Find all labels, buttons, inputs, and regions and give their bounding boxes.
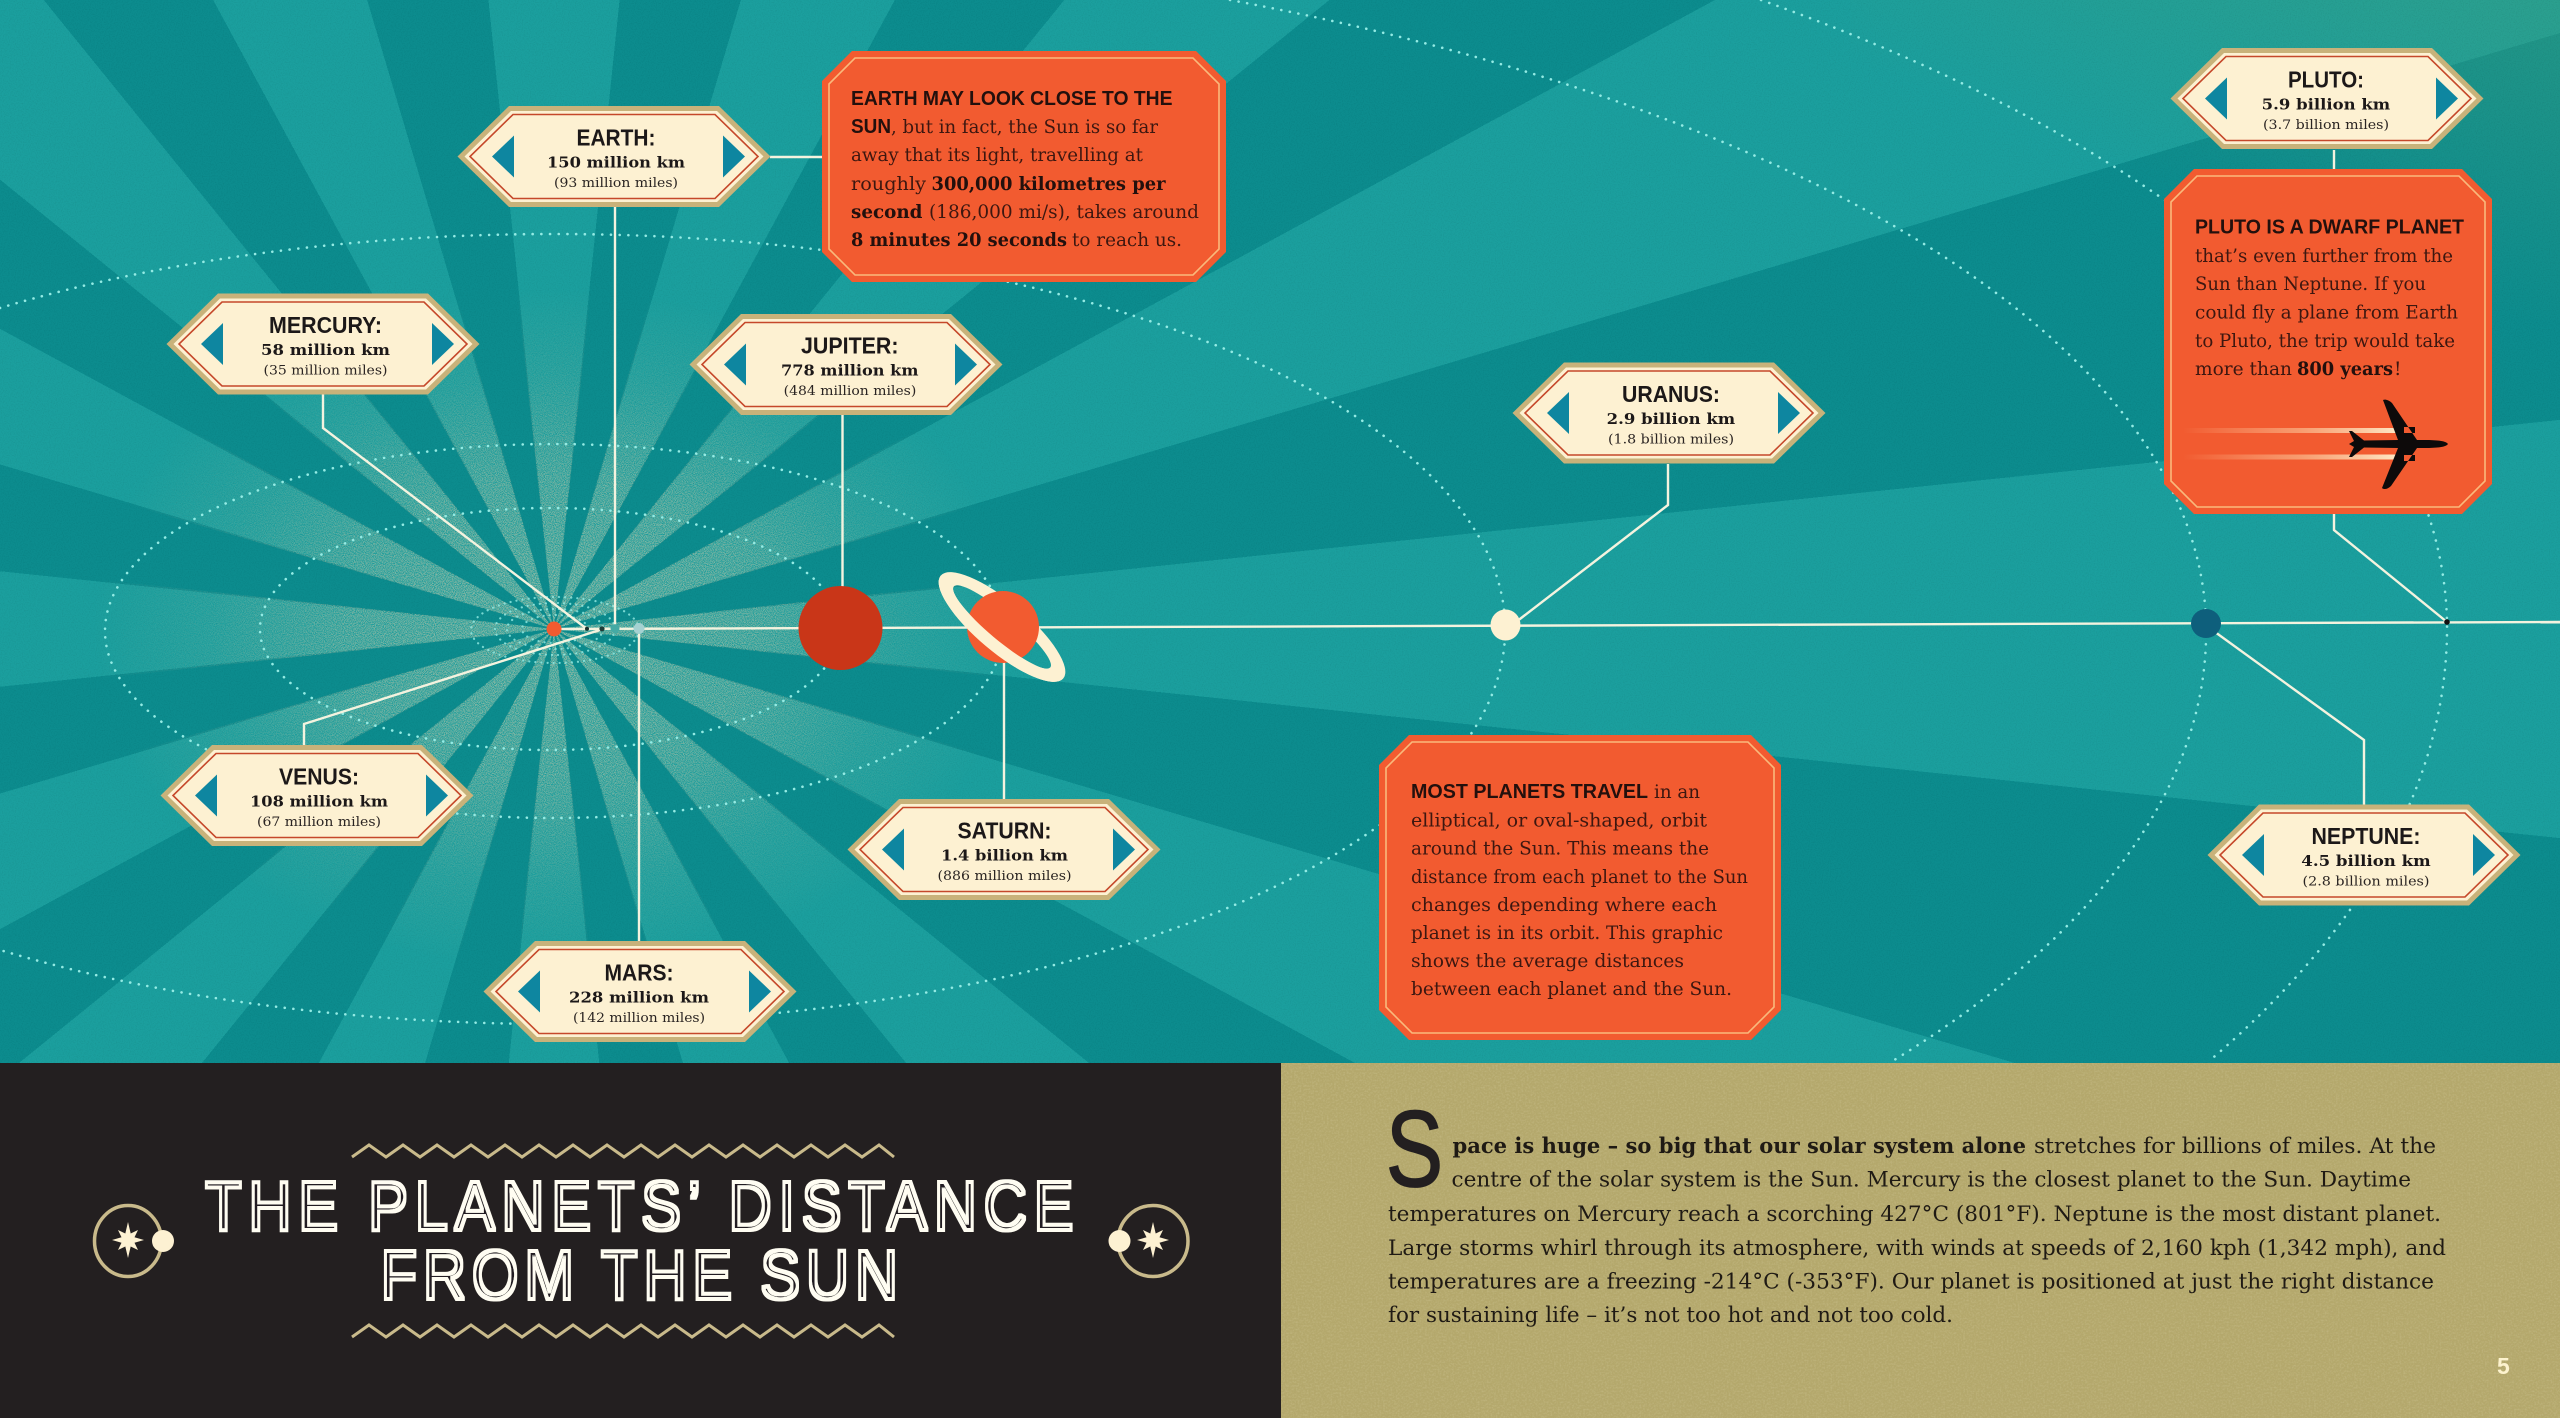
label: Pluto: PLUTO: bbox=[2288, 66, 2364, 92]
label: Mercury: MERCURY: bbox=[269, 312, 382, 338]
planet: Venus bbox=[599, 626, 605, 631]
label: Jupiter: (484 million miles) bbox=[784, 384, 916, 399]
title line two: FROM THE SUN bbox=[380, 1236, 898, 1314]
callout: elliptical orbits: between each planet and the Sun. bbox=[1411, 979, 1732, 1000]
connector lines bbox=[304, 150, 2560, 941]
label: Venus: (67 million miles) bbox=[257, 815, 381, 830]
label: Mars: MARS: bbox=[604, 960, 674, 986]
panel: background tint and grain bbox=[0, 0, 2560, 1063]
label: Saturn: (886 million miles) bbox=[938, 869, 1072, 884]
drop cap: S bbox=[1386, 1088, 1443, 1209]
icon: Sun bbox=[546, 622, 562, 636]
planet: Earth bbox=[610, 624, 620, 633]
panel: title band bbox=[0, 1063, 1281, 1418]
planet: Neptune bbox=[2191, 609, 2221, 638]
label: Uranus bbox=[1512, 362, 1826, 464]
label: Saturn: 1.4 billion km bbox=[941, 846, 1068, 864]
body paragraph: temperatures on Mercury reach a scorching 427°C (801°F). Neptune is the most distant planet. bbox=[1388, 1202, 2441, 1226]
callout: elliptical orbits: planet is in its orbit. This graphic bbox=[1411, 923, 1723, 944]
callout: Earth light travel: 8 minutes 20 seconds bbox=[851, 230, 1067, 251]
label: Mercury: (35 million miles) bbox=[264, 364, 388, 378]
callout: Earth light travel: , but in fact, the Sun is so far bbox=[891, 117, 1158, 138]
callout: Earth light travel: to reach us. bbox=[1072, 230, 1182, 251]
label: Venus: VENUS: bbox=[279, 764, 359, 790]
label: Jupiter bbox=[690, 314, 1002, 415]
panel: intro text bbox=[1281, 1063, 2560, 1418]
icon: aeroplane bbox=[2349, 400, 2448, 489]
callout: Earth light travel: second bbox=[851, 202, 923, 223]
callout: Earth light travel: away that its light, travelling at bbox=[851, 145, 1144, 166]
label: Earth bbox=[458, 106, 770, 207]
label: Earth: (93 million miles) bbox=[554, 176, 678, 191]
callout: elliptical orbits: shows the average distances bbox=[1411, 951, 1684, 972]
label: Earth: 150 million km bbox=[547, 154, 685, 172]
icon: contrails bbox=[2183, 428, 2397, 460]
label: Neptune: (2.8 billion miles) bbox=[2302, 874, 2430, 890]
callout: Pluto dwarf planet bbox=[2164, 169, 2492, 514]
label: Pluto: 5.9 billion km bbox=[2262, 96, 2390, 114]
panel: sunburst background rays bbox=[0, 0, 2560, 1063]
label: Venus: 108 million km bbox=[250, 792, 388, 810]
callout: Earth light travel: (186,000 mi/s), takes around bbox=[929, 202, 1199, 223]
body paragraph: Large storms whirl through its atmosphere, with winds at speeds of 2,160 kph (1,342 mph), and bbox=[1388, 1236, 2446, 1260]
callout: elliptical orbits bbox=[1379, 735, 1781, 1040]
decorative zigzag bottom bbox=[352, 1325, 894, 1337]
label: Mars: 228 million km bbox=[569, 988, 709, 1006]
callout: Pluto dwarf planet: PLUTO IS A DWARF PLANET bbox=[2195, 216, 2464, 238]
label: Mars bbox=[484, 941, 796, 1042]
callout: Earth light travel: roughly bbox=[851, 174, 927, 195]
planet: Mars bbox=[634, 623, 644, 634]
label: Jupiter: JUPITER: bbox=[801, 332, 898, 358]
orbits: dotted ellipses bbox=[0, 0, 2447, 1062]
page number: 5 bbox=[2497, 1353, 2510, 1379]
label: Neptune: NEPTUNE: bbox=[2312, 823, 2420, 849]
label: Earth: EARTH: bbox=[576, 124, 656, 150]
callout: elliptical orbits: MOST PLANETS TRAVEL bbox=[1411, 781, 1648, 803]
planet: Jupiter bbox=[798, 586, 882, 670]
label: Mercury bbox=[166, 294, 480, 394]
label: Mercury: 58 million km bbox=[261, 341, 390, 359]
body paragraph: temperatures are a freezing -214°C (-353°F). Our planet is positioned at just the right distance bbox=[1388, 1270, 2434, 1294]
callout: Pluto dwarf planet: could fly a plane from Earth bbox=[2195, 302, 2458, 324]
callout: Pluto dwarf planet: Sun than Neptune. If you bbox=[2195, 274, 2426, 295]
planet: Pluto bbox=[2444, 619, 2450, 625]
icon: right orbit badge bbox=[1108, 1206, 1188, 1276]
callout: Pluto dwarf planet: ! bbox=[2394, 359, 2401, 380]
label: Neptune: 4.5 billion km bbox=[2301, 852, 2431, 870]
callout: Pluto dwarf planet: more than bbox=[2195, 359, 2292, 380]
title line one: THE PLANETS’ DISTANCE bbox=[205, 1167, 1074, 1245]
callout: elliptical orbits: changes depending where each bbox=[1411, 895, 1717, 916]
label: Pluto: (3.7 billion miles) bbox=[2263, 118, 2389, 133]
callout: Earth light travel: SUN bbox=[851, 116, 891, 138]
label: Venus bbox=[160, 745, 474, 846]
label: Uranus: (1.8 billion miles) bbox=[1608, 432, 1734, 448]
decorative zigzag top bbox=[352, 1145, 894, 1157]
label: Neptune bbox=[2208, 804, 2520, 906]
icon: left orbit badge bbox=[94, 1206, 174, 1276]
body paragraph: centre of the solar system is the Sun. Mercury is the closest planet to the Sun. Daytime bbox=[1452, 1168, 2411, 1192]
body paragraph: for sustaining life – it’s not too hot and not too cold. bbox=[1388, 1303, 1953, 1327]
planet: Uranus bbox=[1490, 610, 1520, 640]
label: Saturn bbox=[848, 799, 1160, 900]
callout: Earth light travel bbox=[822, 51, 1226, 282]
body paragraph: stretches for billions of miles. At the bbox=[2034, 1134, 2436, 1158]
callout: elliptical orbits: in an bbox=[1654, 782, 1700, 803]
body paragraph: pace is huge – so big that our solar system alone bbox=[1452, 1133, 2026, 1158]
callout: elliptical orbits: around the Sun. This means the bbox=[1411, 838, 1709, 860]
planet: Mercury bbox=[585, 627, 589, 631]
callout: elliptical orbits: distance from each planet to the Sun bbox=[1411, 867, 1748, 888]
callout: Pluto dwarf planet: to Pluto, the trip would take bbox=[2195, 331, 2455, 352]
callout: Pluto dwarf planet: that’s even further from the bbox=[2195, 246, 2453, 267]
label: Jupiter: 778 million km bbox=[781, 362, 919, 380]
body paragraph bbox=[1388, 1133, 2446, 1327]
label: Uranus: 2.9 billion km bbox=[1607, 410, 1735, 428]
label: Saturn: SATURN: bbox=[958, 818, 1052, 844]
planet: Saturn bbox=[938, 572, 1066, 682]
label: Uranus: URANUS: bbox=[1622, 381, 1720, 407]
callout: Pluto dwarf planet: 800 years bbox=[2297, 359, 2393, 380]
label: Pluto bbox=[2170, 48, 2484, 149]
callout: Earth light travel: 300,000 kilometres per bbox=[932, 174, 1166, 195]
label: Mars: (142 million miles) bbox=[573, 1011, 705, 1026]
callout: elliptical orbits: elliptical, or oval-shaped, orbit bbox=[1411, 810, 1708, 832]
callout: Earth light travel: EARTH MAY LOOK CLOSE TO THE bbox=[851, 88, 1172, 110]
